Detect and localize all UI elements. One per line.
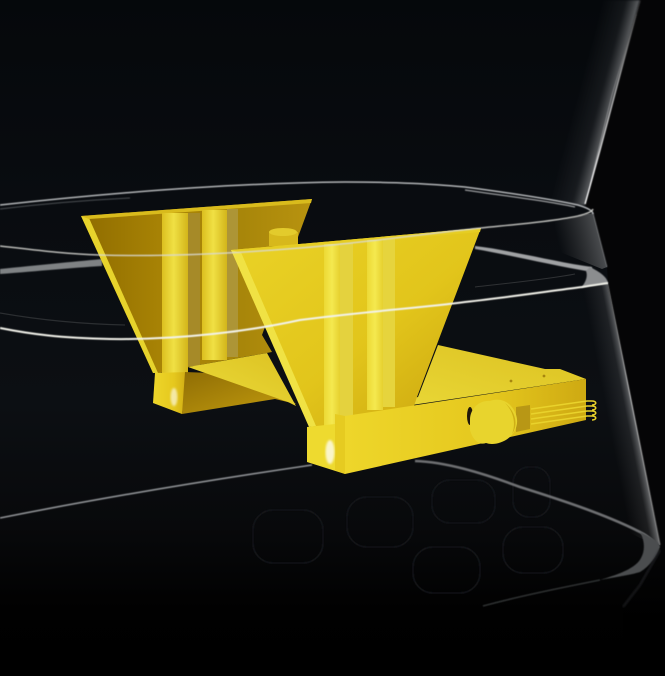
- bottom band tail: [483, 580, 600, 606]
- horn rim left: [231, 250, 316, 427]
- faint inner line: [475, 274, 575, 287]
- front block: [307, 379, 586, 474]
- horn rear wall: [81, 199, 312, 373]
- horn front wall: [231, 228, 481, 428]
- connector pins: [531, 401, 596, 424]
- upper body glow: [540, 0, 640, 205]
- column 1: [162, 213, 200, 373]
- faint touch-panel icons: [253, 467, 563, 593]
- faint reflection: [0, 313, 125, 325]
- lower side wall glow: [560, 283, 660, 545]
- lower side wall edge: [608, 285, 660, 545]
- second band, back edge right: [475, 246, 592, 272]
- bottom band corner: [600, 532, 660, 580]
- block light face: [153, 372, 188, 414]
- connector housing: [516, 405, 530, 432]
- horn rim top: [231, 228, 481, 253]
- upper band, back edge: [0, 182, 593, 214]
- bottom band left: [0, 465, 312, 518]
- block left face: [307, 416, 345, 474]
- front glass band over the horns, lower: [0, 283, 608, 339]
- block highlight: [170, 388, 178, 406]
- knob: [467, 400, 517, 444]
- column 2: [367, 239, 395, 410]
- column 1: [324, 243, 353, 428]
- bottom corner reflection: [623, 550, 660, 607]
- horn rim left: [81, 216, 158, 373]
- front glass band over the horns, upper: [0, 209, 593, 256]
- second band right wedge: [581, 267, 608, 288]
- left horn: [81, 199, 312, 414]
- second band, left thick back edge: [0, 259, 102, 274]
- side wall between upper and middle band: [555, 213, 607, 269]
- block highlight: [326, 440, 334, 464]
- base plate top: [340, 345, 586, 416]
- column 2: [202, 209, 238, 360]
- right horn: [231, 228, 481, 428]
- block shadow face: [182, 372, 296, 414]
- rear post: [269, 228, 298, 246]
- horn rim top: [81, 199, 312, 219]
- side wall outer edge: [593, 213, 607, 267]
- yellow assembly: [81, 199, 596, 474]
- upper body right edge highlight: [585, 1, 640, 204]
- block lip: [335, 414, 345, 474]
- central plate: [188, 353, 296, 406]
- bottom band right: [415, 461, 656, 548]
- plate screw holes: [510, 375, 545, 382]
- block front face: [345, 379, 586, 474]
